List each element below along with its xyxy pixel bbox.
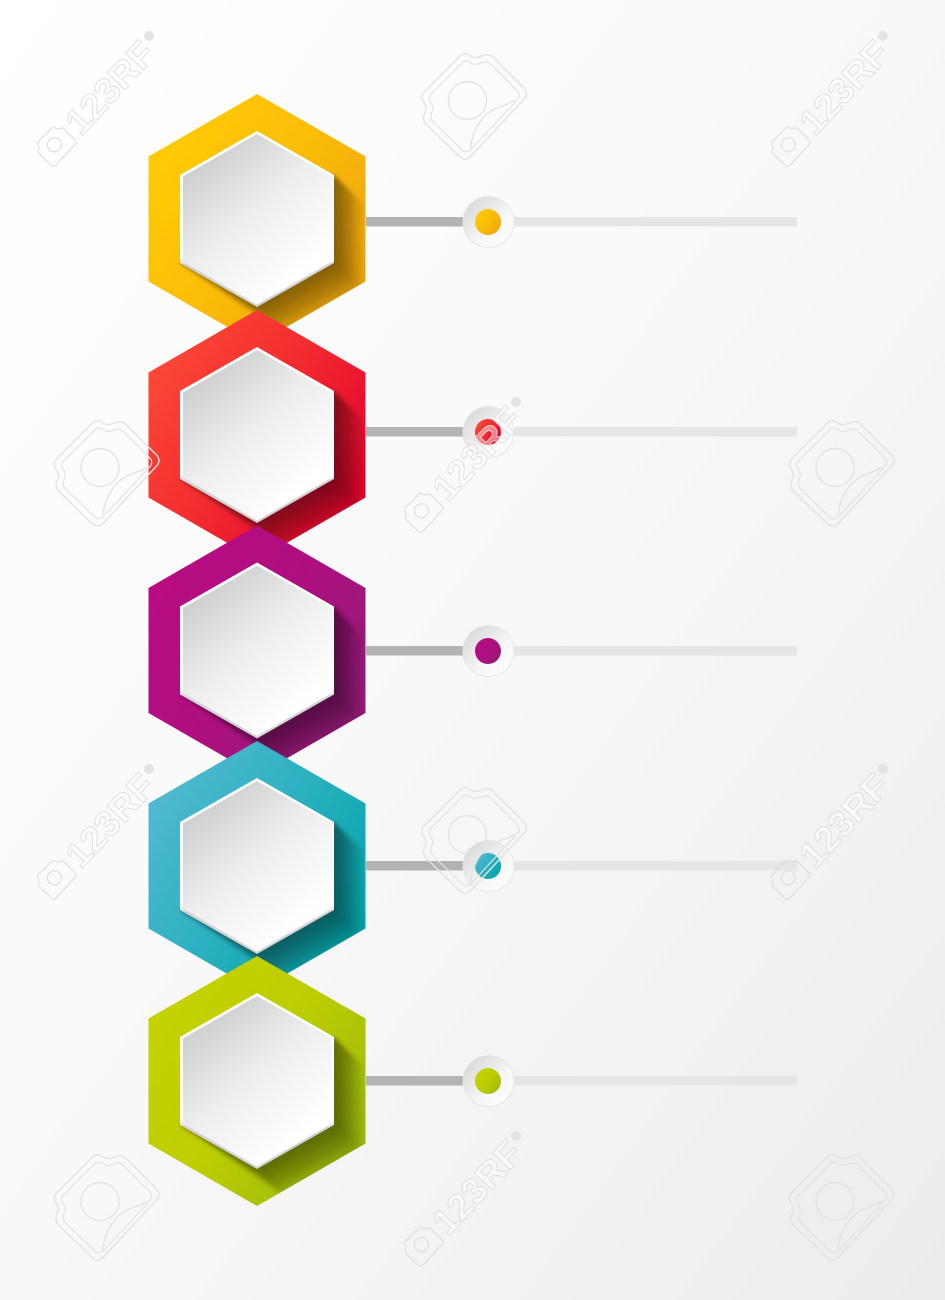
watermark: logo top right xyxy=(772,31,897,166)
watermark: logo lower right xyxy=(772,764,897,899)
connector 1: yellow xyxy=(366,196,797,248)
watermark: egg bottom right xyxy=(789,1155,894,1260)
connector 5: green xyxy=(366,1056,797,1106)
hexagon 2: red xyxy=(148,310,366,560)
watermark: egg lower centre xyxy=(422,788,526,893)
watermark: egg top centre xyxy=(422,54,526,159)
watermark: logo lower right: 123RF xyxy=(791,766,897,875)
watermark: logo top right: 123RF xyxy=(791,33,897,142)
watermark: logo top left: 123RF xyxy=(57,33,163,142)
watermark: logo lower left xyxy=(38,764,163,899)
hexagon 1: yellow xyxy=(148,94,366,344)
connector 4: teal xyxy=(366,840,797,892)
watermark: egg mid right xyxy=(789,421,894,526)
hexagon 3: purple xyxy=(148,526,366,776)
watermark: logo bottom centre xyxy=(405,1131,530,1266)
connector 3: purple xyxy=(366,626,797,676)
watermark: logo top left xyxy=(38,31,163,166)
watermark: logo centre upper: 123RF xyxy=(424,399,530,508)
hexagon 4: teal xyxy=(148,741,366,991)
watermark: egg bottom left xyxy=(54,1155,159,1260)
watermark: logo lower left: 123RF xyxy=(57,766,163,875)
watermark: logo bottom centre: 123RF xyxy=(424,1133,530,1242)
watermark: logo centre upper xyxy=(405,397,530,532)
watermark: egg mid left xyxy=(54,421,159,526)
connector 2: red xyxy=(366,406,797,458)
hexagon 5: green xyxy=(148,956,366,1206)
